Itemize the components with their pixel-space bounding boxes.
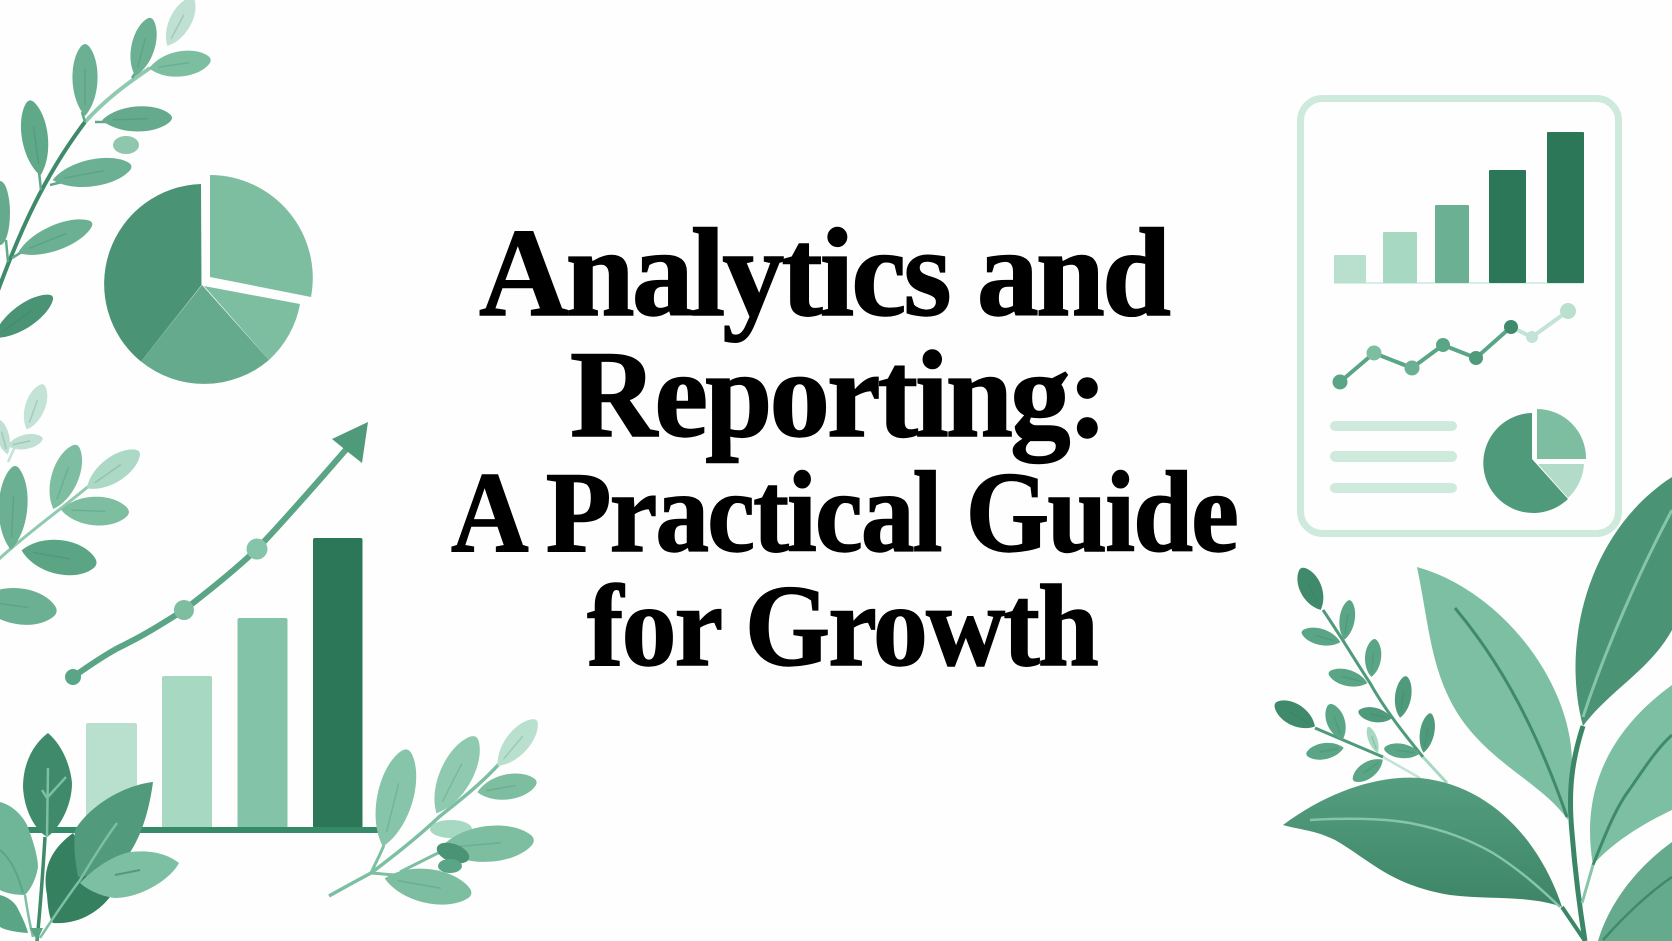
main stem (1570, 726, 1585, 941)
bottom-left plant (0, 733, 179, 941)
pie chart (104, 175, 313, 384)
leaf: large light (1417, 567, 1572, 820)
title: Reporting: (570, 326, 1105, 464)
small sprig bottom-right (1270, 564, 1447, 787)
bottom-middle leafy branch (329, 713, 545, 910)
title (451, 204, 1237, 691)
large plant bottom-right (1283, 477, 1672, 941)
leaf: bottom right (1598, 842, 1672, 941)
title: Analytics and (479, 204, 1170, 343)
leaf: right middle (1590, 685, 1672, 865)
report text lines (1330, 421, 1457, 493)
report bar chart (1334, 132, 1584, 284)
leaf: large dark horizontal (1283, 778, 1562, 907)
report line chart (1332, 303, 1576, 390)
growth arrow line (65, 422, 368, 685)
title: A Practical Guide (451, 449, 1237, 576)
mid-left leafy branch (0, 381, 146, 629)
leaf: upper right dark (1576, 477, 1672, 726)
report card (1300, 98, 1618, 534)
bar chart with baseline (24, 538, 388, 833)
top-left leafy branch (0, 0, 212, 347)
report pie chart (1483, 409, 1586, 513)
title: for Growth (587, 562, 1098, 691)
